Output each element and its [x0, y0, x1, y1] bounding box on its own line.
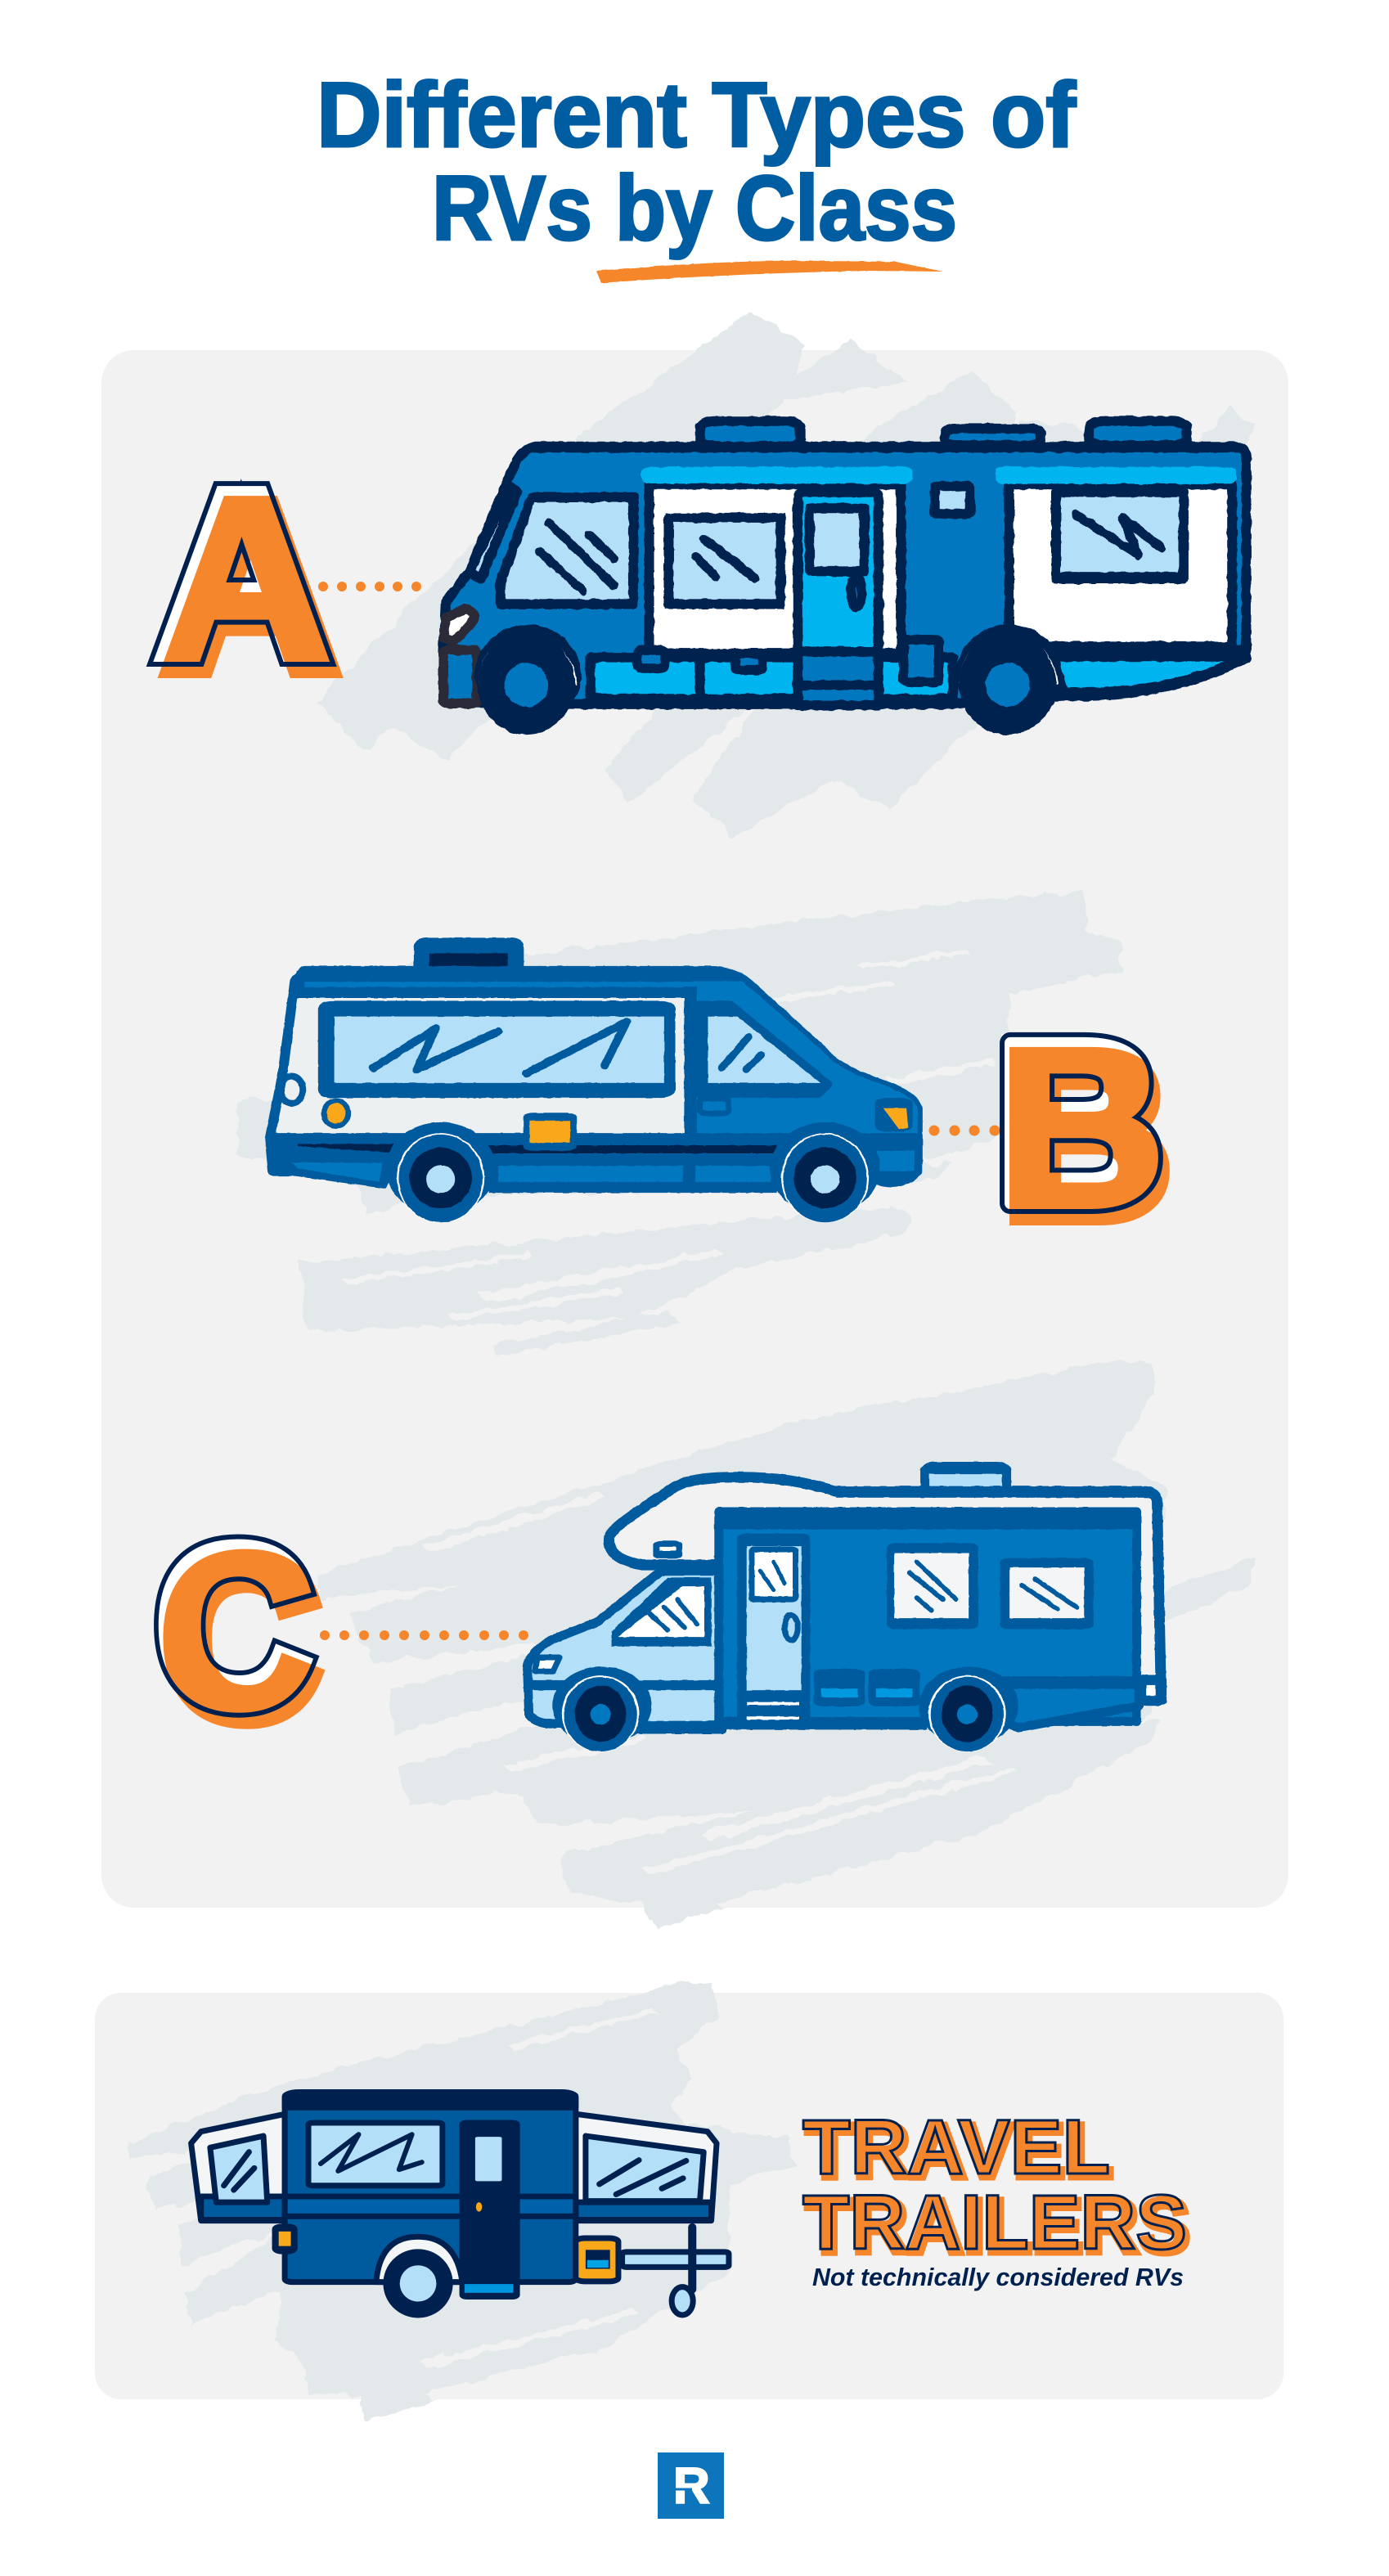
- letter C: C: [163, 1511, 320, 1766]
- cab glare lines: [540, 523, 614, 591]
- headlight: [444, 609, 474, 641]
- roof line: [528, 443, 1244, 452]
- front lower panel: [868, 1144, 921, 1187]
- travel trailer pop-up camper: [191, 2092, 729, 2315]
- door handle: [851, 578, 862, 606]
- door steps: [798, 652, 879, 705]
- brush: class C background: [317, 1362, 1256, 1928]
- letter C: C: [155, 1498, 312, 1753]
- door window: [810, 508, 865, 571]
- body shell: [443, 447, 1246, 704]
- left wing window: [210, 2136, 267, 2202]
- dotted connector A: [318, 582, 421, 591]
- hitch box: [576, 2238, 618, 2282]
- small vent window: [935, 486, 970, 514]
- awning rear: [996, 467, 1236, 483]
- dotted connector C: [320, 1630, 528, 1640]
- panel: travel trailers background: [95, 1993, 1283, 2399]
- brush: class B background: [236, 892, 1122, 1355]
- letter B: B: [1003, 1006, 1171, 1266]
- door pillar: [684, 987, 697, 1139]
- side window two: [1000, 1558, 1094, 1630]
- door: [462, 2123, 517, 2296]
- roof unit: [419, 942, 519, 970]
- letter A: [146, 479, 344, 678]
- subtitle: not technically considered RVs: Not technically considered RVs: [812, 2263, 1184, 2291]
- bottom rail: [642, 1721, 927, 1729]
- door handle: [476, 2202, 482, 2212]
- title: RVs by Class: [432, 157, 957, 259]
- title underline brush: [596, 261, 943, 283]
- front wheel: [770, 1122, 880, 1223]
- rear slide-out panel: [1009, 484, 1232, 646]
- right wing: [576, 2114, 717, 2221]
- jack: [672, 2228, 693, 2315]
- roof unit: [925, 1465, 1007, 1493]
- window glare: [373, 1022, 627, 1073]
- rear body: [270, 971, 918, 1171]
- title: [317, 64, 1077, 259]
- dotted connector B: [929, 1126, 1000, 1135]
- roof rail: [836, 1488, 1150, 1498]
- logo: R: [673, 2458, 710, 2515]
- rear wheel: [385, 1122, 496, 1223]
- rear lamp: [1137, 1675, 1166, 1706]
- door: [737, 1534, 810, 1721]
- logo: [658, 2452, 724, 2519]
- heading: travel trailers: TRAILERS: [806, 2183, 1190, 2270]
- door handle: [784, 1615, 798, 1640]
- RV class B camper van: [267, 942, 921, 1223]
- letter A: A: [164, 453, 337, 720]
- cab rocker: [528, 1680, 721, 1690]
- awning front: [641, 467, 913, 483]
- rear marker light: [321, 1098, 351, 1129]
- marker light: [653, 1540, 682, 1558]
- storage boxes: [814, 1669, 919, 1706]
- heading: travel trailers: [802, 2104, 1190, 2270]
- rear bumps: [281, 1077, 303, 1104]
- RV class C cab-over motorhome: [528, 1465, 1166, 1752]
- title: Different Types of: [317, 64, 1077, 166]
- lower skirt: [591, 658, 953, 699]
- front wheel: [474, 624, 581, 735]
- tongue: [623, 2252, 729, 2267]
- door handle: [700, 1099, 729, 1113]
- letter B: B: [995, 993, 1163, 1253]
- cab-over shell: [609, 1477, 1161, 1681]
- rocker band: [267, 1133, 921, 1147]
- rear wheel: [956, 624, 1063, 735]
- roof band: [297, 971, 739, 998]
- amber side box: [524, 1113, 577, 1151]
- door: [798, 492, 879, 652]
- rear lower panel: [267, 1144, 401, 1189]
- side box: [903, 640, 938, 682]
- door window: [752, 1549, 796, 1599]
- front bumper: [443, 650, 477, 704]
- panel: main classes background: [101, 350, 1288, 1908]
- lower panel: [489, 1153, 777, 1193]
- headlight: [875, 1098, 913, 1132]
- rear skirt: [1052, 657, 1246, 692]
- rear lamp: [275, 2227, 294, 2251]
- headlight: [535, 1657, 560, 1671]
- long side window: [323, 1005, 671, 1093]
- door steps: [747, 1702, 799, 1720]
- right wing window: [586, 2136, 703, 2201]
- heading: travel trailers: TRAILERS: [802, 2179, 1187, 2266]
- side window: [308, 2123, 443, 2186]
- front wheel: [552, 1666, 652, 1752]
- middle window: [668, 518, 780, 605]
- cab window: [612, 1577, 712, 1647]
- cab side window: [501, 497, 633, 605]
- heading: travel trailers: TRAVEL: [806, 2108, 1113, 2195]
- brush: travel trailer background: [128, 1983, 795, 2421]
- body: [285, 2093, 576, 2282]
- side window one: [887, 1543, 978, 1630]
- front slide-out panel: [650, 484, 901, 654]
- heading: travel trailers: TRAVEL: [802, 2104, 1110, 2191]
- letter A: A: [155, 440, 328, 707]
- cab window: [700, 1005, 827, 1093]
- door step: [465, 2284, 513, 2293]
- house box: [719, 1512, 1137, 1721]
- cab: [528, 1571, 722, 1729]
- wheel arch: [376, 2237, 462, 2282]
- hinges: [637, 650, 762, 670]
- brush: class A background: [317, 311, 1254, 838]
- roof units: [700, 421, 1187, 447]
- rear slope: [1004, 1681, 1139, 1728]
- rear window: [1056, 492, 1184, 578]
- front body: [689, 981, 918, 1144]
- wheel: [386, 2252, 450, 2315]
- rear wheel: [919, 1666, 1018, 1752]
- body stripe: [285, 2196, 576, 2216]
- left wing: [191, 2114, 285, 2221]
- windshield sliver: [470, 488, 517, 578]
- RV class A motorhome: [443, 421, 1246, 735]
